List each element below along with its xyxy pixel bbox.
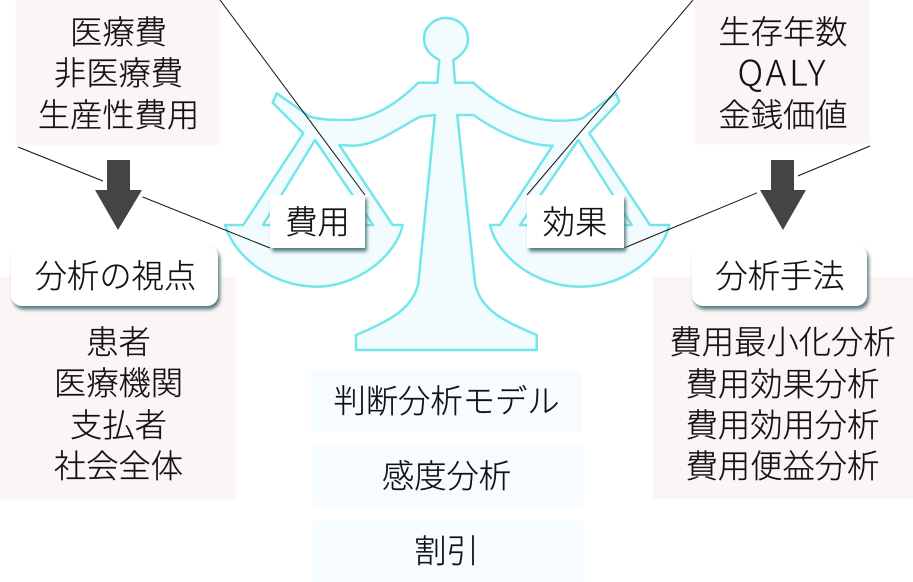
box: discounting: 割引 xyxy=(414,526,479,572)
heading: perspective of analysis xyxy=(11,245,218,306)
arrow: effects to methods xyxy=(760,160,806,230)
text: analysis methods: 費用便益分析 xyxy=(686,442,879,488)
panel: effect items xyxy=(695,0,870,144)
text: analysis methods: 費用最小化分析 xyxy=(669,318,896,364)
panel: analysis methods xyxy=(653,277,913,499)
panel: cost items xyxy=(16,0,220,145)
text: perspectives: 患者 xyxy=(86,318,151,364)
text: analysis methods xyxy=(669,318,896,488)
icon: balance scale xyxy=(225,18,669,350)
panel: perspectives xyxy=(0,277,236,500)
text: cost items: 生産性費用 xyxy=(38,90,199,136)
text: analysis methods: 費用効果分析 xyxy=(686,360,879,406)
connector lines xyxy=(18,0,870,248)
panels: center methods xyxy=(311,370,583,582)
box: discounting xyxy=(312,521,583,582)
text: cost items xyxy=(38,8,199,136)
box: sensitivity analysis xyxy=(312,446,583,506)
text: effect items: 生存年数 xyxy=(718,8,848,54)
heading: perspective of analysis: 分析の視点 xyxy=(35,252,196,298)
heading: analysis methods: 分析手法 xyxy=(715,252,845,298)
label: effect xyxy=(527,195,624,248)
box: sensitivity analysis: 感度分析 xyxy=(382,452,511,498)
text: effect items xyxy=(718,8,848,136)
text: perspectives: 社会全体 xyxy=(54,442,183,488)
box: decision analysis model xyxy=(311,370,582,432)
text: analysis methods: 費用効用分析 xyxy=(686,400,879,446)
text: perspectives: 医療機関 xyxy=(54,358,183,404)
text: effect items: QALY xyxy=(738,46,828,96)
label: cost: 費用 xyxy=(285,198,350,244)
label: effect: 効果 xyxy=(543,198,607,244)
text: effect items: 金銭価値 xyxy=(718,90,848,136)
label: cost xyxy=(270,195,365,248)
text: cost items: 医療費 xyxy=(70,8,167,54)
heading: analysis methods xyxy=(692,245,867,306)
text: cost items: 非医療費 xyxy=(54,48,183,94)
arrow: costs to perspectives xyxy=(95,160,142,230)
text: perspectives: 支払者 xyxy=(70,400,167,446)
box: decision analysis model: 判断分析モデル xyxy=(333,376,560,422)
text: perspectives xyxy=(54,318,183,488)
